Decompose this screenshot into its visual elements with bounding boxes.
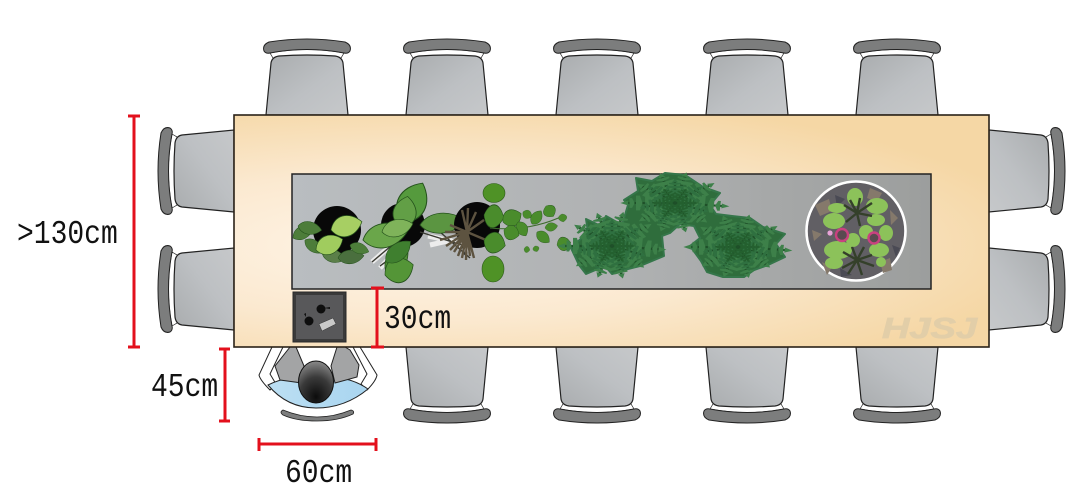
right shoulder (331, 347, 359, 383)
chair: bottom row 2 (404, 347, 490, 423)
chair: top row 1 (264, 39, 350, 115)
chair: bottom row 3 (554, 347, 640, 423)
dimension: seat width (259, 438, 376, 493)
vine leaves (481, 202, 572, 256)
fern cluster 3 (683, 212, 794, 281)
planter inset (292, 174, 931, 289)
arms (259, 347, 377, 390)
label: 30cm (384, 301, 451, 339)
label: 45cm (151, 369, 218, 407)
seated person with chair back (259, 347, 377, 421)
fern cluster 1 (557, 209, 668, 282)
dried spiky plant (440, 208, 486, 260)
power socket box (293, 292, 346, 342)
table top (234, 115, 989, 347)
watermark: HJSJ (882, 313, 978, 345)
dimension: table width (17, 116, 140, 347)
chair: top row 4 (704, 39, 790, 115)
chair: left upper (158, 128, 234, 214)
fern mass (571, 173, 785, 277)
chair: right upper (989, 128, 1065, 214)
chair: top row 2 (404, 39, 490, 115)
dimension: edge distance (371, 288, 451, 347)
plant group: ivy (290, 206, 371, 265)
chair: bottom row 5 (854, 347, 940, 423)
socket face (296, 295, 343, 339)
vine stem (490, 215, 565, 229)
water plant leaves (823, 188, 893, 269)
pot hole (313, 206, 361, 254)
chair: top row 3 (554, 39, 640, 115)
left shoulder (275, 347, 304, 383)
pot hole (381, 203, 425, 247)
dark rosettes (842, 198, 874, 275)
shirt (268, 378, 368, 408)
chair back behind person (281, 410, 354, 421)
white twigs (372, 236, 470, 268)
head (298, 361, 334, 403)
outlet icons (316, 304, 326, 314)
plant group: vine (440, 184, 572, 282)
label: 60cm (285, 455, 352, 493)
dimension: seat depth (151, 349, 230, 421)
card slot (319, 318, 336, 331)
water and gravel (806, 182, 906, 280)
pot hole (454, 202, 500, 248)
round water plant planter (806, 182, 906, 280)
chair: bottom row 4 (704, 347, 790, 423)
label: >130cm (17, 216, 118, 254)
plant group: ferns (557, 169, 794, 282)
ivy foliage (290, 212, 371, 265)
leaves (360, 176, 467, 287)
chair: left lower (158, 246, 234, 332)
chair: top row 5 (854, 39, 940, 115)
plant group: broad leaves (360, 176, 470, 287)
fern cluster 2 (620, 169, 731, 235)
gravel shading (812, 188, 898, 275)
round leaves (483, 184, 505, 202)
pink flowers (836, 229, 848, 241)
chair: right lower (989, 246, 1065, 332)
dark twigs (372, 232, 470, 266)
